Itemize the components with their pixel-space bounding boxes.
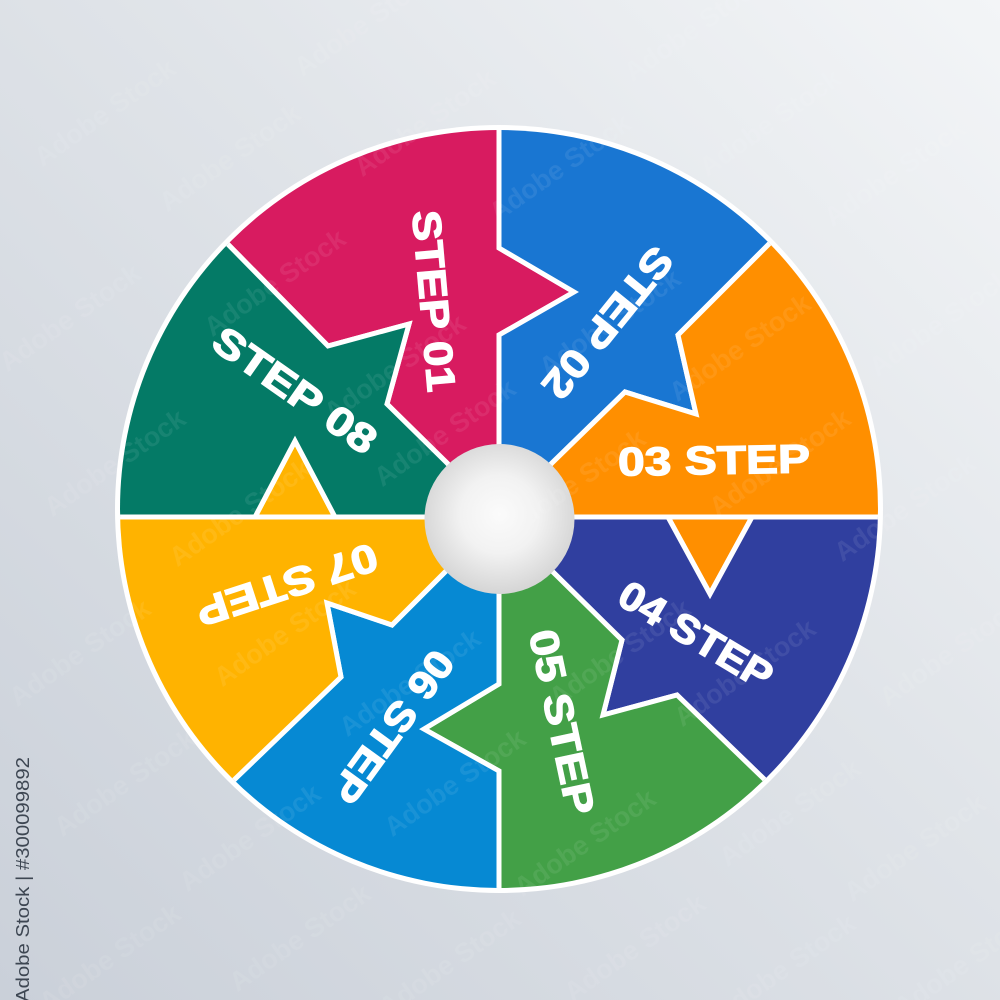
label: 04 STEP: 04 STEP [610,573,781,699]
watermarks: Adobe Stock [694,62,847,182]
watermarks: Adobe Stock [379,722,532,842]
watermarks: Adobe Stock [29,52,182,172]
watermarks: Adobe Stock [224,877,377,997]
watermarks: Adobe Stock [819,112,972,232]
watermarks: Adobe Stock [509,782,662,902]
watermarks: Adobe Stock [154,97,307,217]
watermarks: Adobe Stock [829,447,982,567]
segment 02: blue [496,130,770,463]
watermarks: Adobe Stock [4,592,157,712]
wheel outer white ring [115,125,883,893]
label: 06 STEP: 06 STEP [322,641,462,811]
watermarks: Adobe Stock [164,452,317,572]
label: STEP 02: STEP 02 [533,238,682,407]
watermarks: Adobe Stock [334,622,487,742]
label: STEP 08: STEP 08 [204,318,385,463]
watermarks: Adobe Stock [174,777,327,897]
watermarks: Adobe Stock [209,572,362,692]
watermarks: Adobe Stock [704,402,857,522]
watermarks: Adobe Stock [669,612,822,732]
watermarks: Adobe Stock [544,592,697,712]
segment 07: amber [120,446,448,782]
label: 05 STEP: 05 STEP [520,626,602,819]
watermarks: Adobe Stock [714,752,867,872]
wheel segments [120,130,878,888]
label: 03 STEP: 03 STEP [618,437,810,485]
label: 07 STEP: 07 STEP [190,534,383,634]
segment 04: navy [554,514,878,780]
watermarks: Adobe Stock [534,262,687,382]
segment 06: light blue [234,573,502,888]
center hub sphere [424,444,574,594]
watermarks: Adobe Stock [319,307,472,427]
watermarks: Adobe Stock [349,62,502,182]
watermarks: Adobe Stock [499,422,652,542]
segment 05: green [429,570,766,888]
label: STEP 01: STEP 01 [403,209,463,394]
watermarks: Adobe Stock [369,372,522,492]
watermarks: Adobe Stock [484,107,637,227]
watermarks: Adobe Stock [199,222,352,342]
segment 08: teal [120,242,450,520]
segment 01: pink [228,130,569,463]
stock id text: Adobe Stock | #300099892 [12,757,33,1000]
watermarks: Adobe Stock [839,787,992,907]
watermarks: Adobe Stock [664,287,817,407]
watermarks: Adobe Stock [39,402,192,522]
horizontal divider [100,514,900,520]
segment 03: orange [549,242,878,588]
watermarks: Adobe Stock [49,722,202,842]
